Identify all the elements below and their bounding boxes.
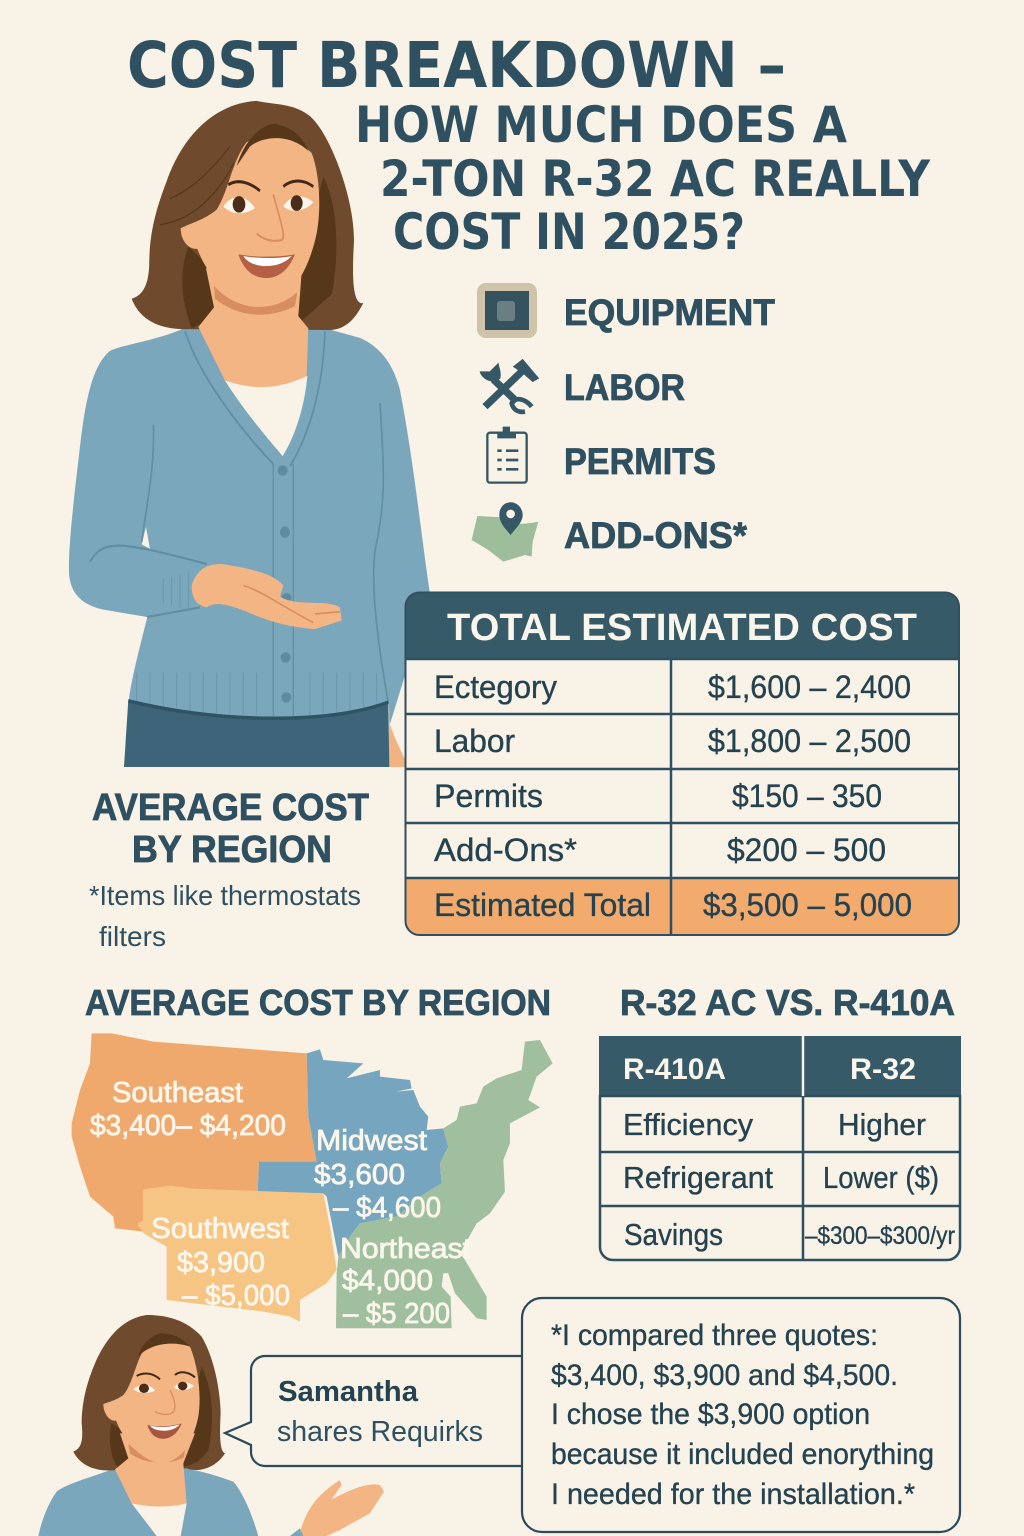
label: northeast: Northeast <box>340 1233 471 1265</box>
table rows <box>434 669 912 923</box>
region: northeast green <box>336 1040 553 1328</box>
label: southeast: $3,400– $4,200 <box>90 1110 286 1142</box>
heading: average cost by region (upper): BY REGION <box>132 829 332 871</box>
face <box>103 1342 200 1463</box>
icon: clipboard <box>487 427 527 483</box>
comparison rows: –$300–$300/yr <box>805 1222 955 1250</box>
label: labor: LABOR <box>564 367 685 408</box>
label: southeast <box>90 1077 286 1142</box>
comparison rows: Lower ($) <box>823 1160 939 1195</box>
neck <box>115 1433 195 1506</box>
title <box>127 29 931 261</box>
facial features <box>133 1372 195 1439</box>
callout: quote bubble <box>522 1298 960 1532</box>
hair back <box>132 101 363 330</box>
table rows: $150 – 350 <box>732 778 882 814</box>
callout: quote bubble: I chose the $3,900 option <box>551 1398 870 1431</box>
label: midwest <box>314 1125 441 1224</box>
white top <box>225 376 307 456</box>
comparison rows: Efficiency <box>623 1107 753 1142</box>
callout: quote bubble: I needed for the installation.* <box>551 1478 915 1511</box>
icon: map pin <box>472 502 538 562</box>
hair <box>73 1315 225 1471</box>
callout: quote bubble: *I compared three quotes: <box>551 1319 878 1352</box>
cardigan <box>38 1468 258 1536</box>
heading: r-32 vs r-410a: R-32 AC VS. R-410A <box>620 982 955 1023</box>
icon: tools <box>480 359 539 412</box>
comparison header: R-410A <box>623 1053 726 1086</box>
heading: average cost by region (upper): AVERAGE COST <box>92 787 369 829</box>
heading: average cost by region (upper) <box>92 787 369 871</box>
label: permits: PERMITS <box>564 441 716 482</box>
callout: samantha speech bubble <box>225 1356 522 1466</box>
label: southwest: $3,900 <box>177 1247 265 1279</box>
white top <box>132 1503 187 1536</box>
table rows: Add-Ons* <box>434 832 577 868</box>
footnote <box>89 880 361 952</box>
region: midwest blue <box>258 1049 448 1257</box>
pants waist <box>128 701 388 718</box>
pants <box>124 700 389 767</box>
label: northeast <box>340 1233 471 1330</box>
eyebrows <box>228 181 313 191</box>
mouth <box>238 254 295 278</box>
cardigan buttons <box>278 465 292 703</box>
table rows: Permits <box>434 778 543 814</box>
nose <box>257 194 283 241</box>
comparison rows <box>623 1107 955 1252</box>
neck <box>198 268 308 387</box>
heading: average cost by region: AVERAGE COST BY REGION <box>85 982 551 1023</box>
panel: total estimated cost table <box>405 592 959 935</box>
label: midwest: – $4,600 <box>333 1192 441 1224</box>
label: equipment: EQUIPMENT <box>564 292 775 333</box>
panel: comparison table <box>599 1036 961 1260</box>
label: southwest <box>151 1213 290 1312</box>
table rows: $3,500 – 5,000 <box>703 887 912 923</box>
comparison header <box>623 1053 916 1086</box>
label: southwest: Southwest <box>151 1213 289 1245</box>
arm skin <box>388 723 405 767</box>
title: HOW MUCH DOES A <box>355 96 847 154</box>
comparison header: R-32 <box>850 1053 916 1086</box>
table rows: Labor <box>434 723 515 759</box>
table rows: $1,600 – 2,400 <box>708 669 911 705</box>
illustration: small woman <box>38 1315 384 1536</box>
face <box>181 137 319 303</box>
label: midwest: $3,600 <box>314 1159 405 1191</box>
table rows: Ectegory <box>434 669 557 705</box>
label: southeast: Southeast <box>112 1077 243 1109</box>
footnote: filters <box>99 921 166 952</box>
callout: quote bubble: because it included enorything <box>551 1438 934 1471</box>
title: 2-TON R-32 AC REALLY <box>380 150 931 208</box>
hand <box>192 564 342 629</box>
cardigan shading <box>273 464 293 716</box>
label: northeast: – $5 200 <box>343 1298 450 1330</box>
callout: quote bubble: $3,400, $3,900 and $4,500. <box>551 1359 898 1392</box>
footnote: *Items like thermostats <box>89 880 361 911</box>
sleeve gap <box>142 527 150 549</box>
eyes <box>223 197 313 213</box>
callout name: Samantha <box>278 1376 419 1408</box>
title: COST BREAKDOWN – <box>127 29 786 102</box>
label: southwest: – $5,000 <box>182 1280 290 1312</box>
comparison rows: Higher <box>838 1107 926 1142</box>
table rows: $1,800 – 2,500 <box>708 723 911 759</box>
callout caption: shares Requirks <box>277 1416 483 1448</box>
hair strands <box>160 147 233 225</box>
label: add-ons: ADD-ONS* <box>564 515 748 556</box>
comparison rows: Savings <box>624 1217 723 1252</box>
hair part <box>237 124 308 166</box>
table rows: $200 – 500 <box>727 832 886 868</box>
comparison rows: Refrigerant <box>623 1160 773 1195</box>
label: midwest: Midwest <box>316 1125 427 1157</box>
icon: equipment <box>477 283 537 338</box>
region: west orange <box>72 1033 317 1232</box>
cardigan <box>69 325 430 724</box>
region: southwest yellow <box>138 1186 337 1322</box>
map: cost by region <box>72 1033 553 1330</box>
table rows: Estimated Total <box>434 887 651 923</box>
label: northeast: $4,000 <box>342 1265 433 1297</box>
hand <box>300 1480 384 1536</box>
illustration: large woman presenting <box>69 101 430 767</box>
table heading: TOTAL ESTIMATED COST <box>447 607 917 649</box>
title: COST IN 2025? <box>393 203 745 261</box>
